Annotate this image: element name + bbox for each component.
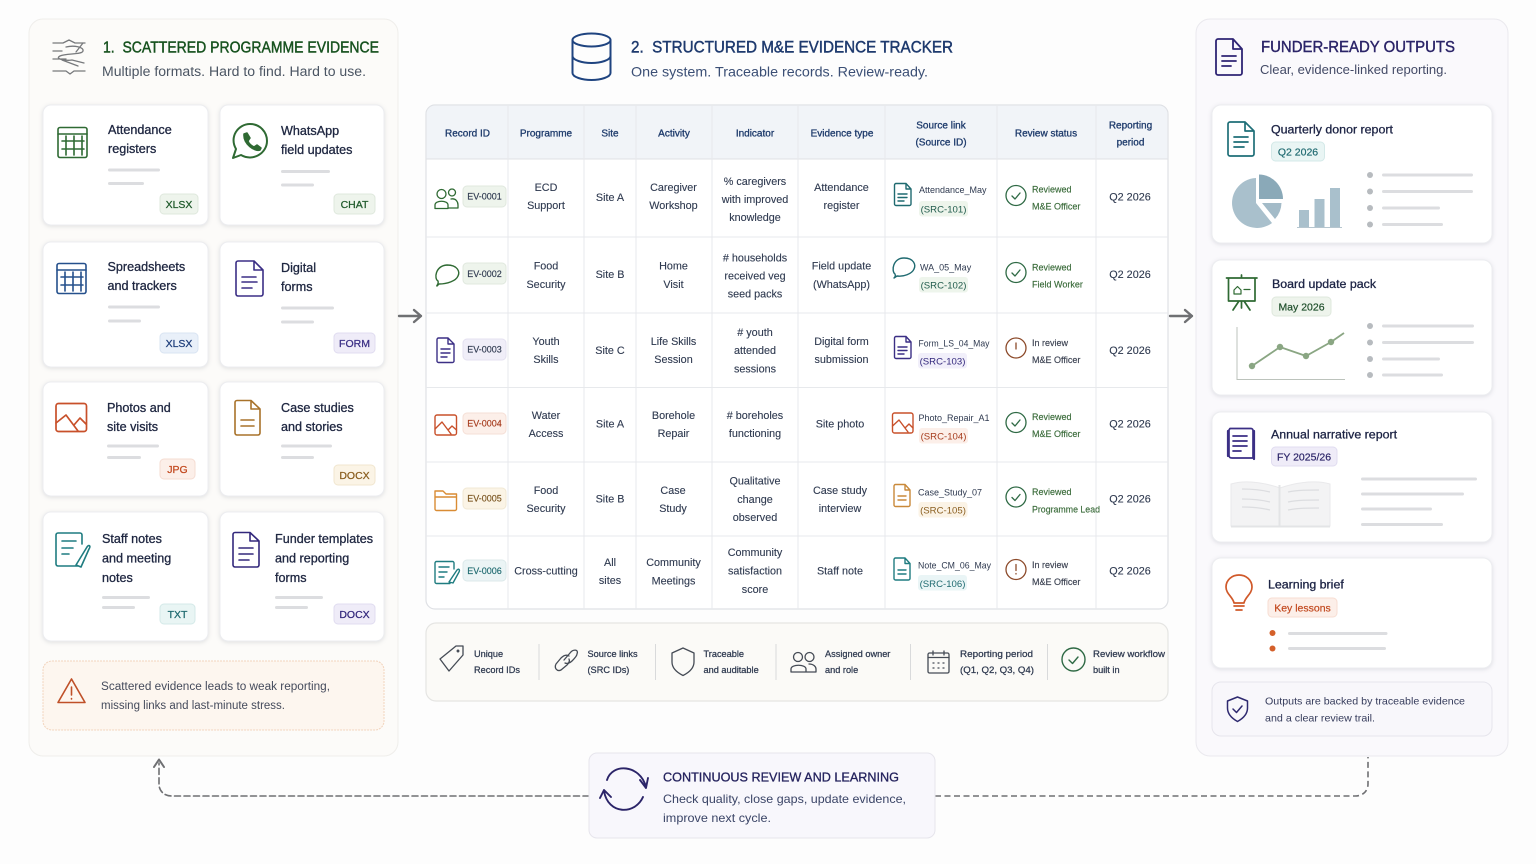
table row: EV-0006 bbox=[435, 547, 1151, 596]
feature: source links: (SRC IDs) bbox=[588, 665, 629, 675]
feature: traceable and auditable: Traceable bbox=[704, 649, 744, 659]
table row: EV-0002: Site B bbox=[596, 269, 624, 281]
source ID pill bbox=[919, 201, 968, 216]
record ID pill: EV-0002 bbox=[467, 269, 502, 279]
callout: traceable evidence note: and a clear review trail. bbox=[1265, 712, 1375, 724]
card: attendance registers bbox=[43, 105, 208, 225]
record ID pill bbox=[463, 560, 506, 581]
tag: XLSX: XLSX bbox=[166, 199, 192, 211]
record ID pill: EV-0005 bbox=[467, 494, 502, 504]
icon: document bbox=[437, 338, 454, 362]
panel background bbox=[1196, 19, 1508, 756]
review status: Programme Lead bbox=[1032, 504, 1100, 514]
tag: CHAT bbox=[334, 194, 375, 214]
card: spreadsheets and trackers bbox=[43, 242, 208, 367]
subheading: One system. Traceable records. Review-ready. bbox=[631, 64, 928, 80]
card: funder templates and reporting forms bbox=[220, 512, 384, 641]
heading: funder-ready outputs: FUNDER-READY OUTPUTS bbox=[1261, 39, 1455, 56]
record ID pill bbox=[463, 413, 506, 434]
tag: JPG bbox=[160, 459, 195, 479]
table row: EV-0003: sessions bbox=[734, 364, 777, 376]
callout: scattered evidence warning bbox=[43, 661, 384, 730]
table row: EV-0004: Site A bbox=[596, 418, 625, 430]
icon: shield check bbox=[1228, 697, 1248, 722]
icon: WhatsApp bbox=[233, 124, 267, 158]
review status: Reviewed bbox=[1032, 487, 1072, 497]
placeholder bullet list bbox=[1367, 323, 1474, 378]
source ID pill bbox=[919, 277, 968, 292]
table row: EV-0006: Note_CM_06_May bbox=[918, 560, 991, 570]
table row: EV-0002: received veg bbox=[724, 270, 786, 282]
icon: teal document bbox=[1228, 122, 1254, 156]
panel: continuous review and learning bbox=[589, 753, 935, 838]
source ID pill bbox=[919, 428, 968, 444]
card: staff notes and meeting notes: notes bbox=[102, 571, 133, 585]
table row: EV-0001: with improved bbox=[721, 194, 788, 206]
source ID pill: (SRC-101) bbox=[921, 204, 966, 216]
source ID pill: (SRC-103) bbox=[920, 356, 965, 368]
heading: tracker title: 2. STRUCTURED M&E EVIDENCE TRACKER bbox=[631, 38, 953, 56]
table row: EV-0005: Site B bbox=[596, 494, 624, 506]
table row: EV-0005: Case bbox=[660, 485, 686, 497]
tag: XLSX bbox=[160, 333, 198, 353]
arrow: evidence to tracker bbox=[399, 310, 421, 322]
icon: amber document bbox=[235, 400, 260, 435]
feature: unique record IDs: Record IDs bbox=[474, 665, 520, 675]
table header row: Review status bbox=[1015, 128, 1077, 140]
panel: continuous review and learning: Check quality, close gaps, update evidence, bbox=[663, 792, 906, 806]
placeholder lines bbox=[1361, 478, 1477, 526]
table row: EV-0005: Food bbox=[534, 485, 558, 497]
icon: calendar bbox=[928, 651, 949, 673]
icon: document bbox=[1216, 39, 1242, 75]
table header row: Programme bbox=[520, 128, 573, 140]
panel background bbox=[29, 19, 398, 756]
callout: scattered evidence warning: Scattered evidence leads to weak reporting, bbox=[101, 681, 330, 693]
tag: FORM bbox=[334, 333, 375, 353]
table row: EV-0001: ECD bbox=[535, 182, 558, 194]
table row: EV-0003: Site C bbox=[595, 345, 625, 357]
table row: EV-0001: Caregiver bbox=[650, 182, 697, 194]
icon: source document bbox=[894, 336, 911, 358]
feature: assigned owner: and role bbox=[825, 665, 858, 675]
card: digital forms: Digital bbox=[281, 261, 316, 275]
icon: warning triangle bbox=[58, 679, 85, 702]
card: WhatsApp field updates: field updates bbox=[281, 143, 352, 157]
tag: TXT bbox=[160, 604, 195, 624]
source ID pill: (SRC-104) bbox=[921, 432, 966, 442]
source ID pill bbox=[918, 575, 967, 590]
table row: EV-0001: Attendance_May bbox=[919, 185, 987, 195]
record ID pill bbox=[463, 263, 506, 284]
record ID pill: EV-0004 bbox=[467, 418, 502, 428]
feature: assigned owner: Assigned owner bbox=[825, 649, 890, 659]
icon: teal note and pen bbox=[56, 533, 90, 567]
table row: EV-0004: Site photo bbox=[816, 418, 864, 430]
feature: traceable and auditable bbox=[672, 648, 759, 676]
table row: EV-0002: # households bbox=[723, 252, 788, 264]
pill: FY 2025/26: FY 2025/26 bbox=[1277, 452, 1331, 464]
tag: XLSX: XLSX bbox=[166, 338, 192, 350]
card: annual narrative report: Annual narrative report bbox=[1271, 428, 1398, 442]
table row: EV-0003: Form_LS_04_May bbox=[918, 338, 990, 348]
icon: shield bbox=[672, 648, 694, 676]
table row: EV-0004: Repair bbox=[658, 428, 690, 440]
table row: EV-0002: Food bbox=[534, 260, 558, 272]
tag: JPG: JPG bbox=[167, 464, 188, 476]
heading: scattered programme evidence: 1. SCATTERED PROGRAMME EVIDENCE bbox=[103, 40, 379, 56]
icon: source chat bubble bbox=[893, 258, 915, 278]
icon: report booklet bbox=[1228, 428, 1254, 459]
table row: EV-0005: Security bbox=[526, 503, 566, 515]
table row: EV-0001: Q2 2026 bbox=[1109, 192, 1151, 204]
table row: EV-0006: Community bbox=[728, 547, 783, 559]
review status: Reviewed bbox=[1032, 184, 1072, 194]
table row: EV-0003: Youth bbox=[532, 336, 560, 348]
review status bbox=[1006, 412, 1080, 439]
table row: EV-0005: observed bbox=[733, 512, 777, 524]
icon: lightbulb bbox=[1226, 575, 1252, 610]
feature: unique record IDs: Unique bbox=[474, 649, 503, 659]
icon: source document bbox=[894, 184, 911, 206]
table row: EV-0002: seed packs bbox=[728, 288, 783, 300]
table row: EV-0004: # boreholes bbox=[727, 410, 784, 422]
table row: EV-0002: Home bbox=[659, 260, 688, 272]
table header row: Reporting bbox=[1109, 120, 1152, 132]
panel: scattered programme evidence bbox=[29, 19, 398, 756]
table row: EV-0003: Skills bbox=[533, 354, 559, 366]
card: case studies and stories: Case studies bbox=[281, 401, 354, 415]
card: funder templates and reporting forms: Funder templates bbox=[275, 532, 373, 546]
table header row: Source link bbox=[916, 120, 967, 132]
table row: EV-0004: Q2 2026 bbox=[1109, 418, 1151, 430]
chart: pie bbox=[1232, 174, 1283, 228]
icon: folder bbox=[435, 491, 456, 510]
review status: M&E Officer bbox=[1032, 577, 1080, 587]
tag: FORM: FORM bbox=[339, 338, 370, 350]
pill: key lessons: Key lessons bbox=[1274, 602, 1331, 614]
table header row: Record ID bbox=[445, 128, 490, 140]
table row: EV-0003: Q2 2026 bbox=[1109, 345, 1151, 357]
feature: reporting period bbox=[928, 649, 1034, 675]
table row: EV-0001: Attendance bbox=[814, 182, 869, 194]
table header row: Indicator bbox=[736, 128, 775, 140]
table row: EV-0003: attended bbox=[734, 345, 776, 357]
card: digital forms bbox=[220, 242, 384, 367]
pill: FY 2025/26 bbox=[1272, 447, 1337, 466]
feature: review workflow bbox=[1062, 648, 1165, 675]
review status bbox=[1006, 560, 1080, 587]
table row: EV-0001: register bbox=[823, 200, 860, 212]
icon: database bbox=[572, 34, 610, 80]
card: staff notes and meeting notes bbox=[43, 512, 208, 641]
source ID pill bbox=[918, 353, 967, 368]
table row: EV-0006: Q2 2026 bbox=[1109, 566, 1151, 578]
card: quarterly donor report bbox=[1212, 105, 1492, 243]
callout: traceable evidence note: Outputs are backed by traceable evidence bbox=[1265, 696, 1465, 708]
subheading: Clear, evidence-linked reporting. bbox=[1260, 63, 1447, 77]
record ID pill: EV-0003 bbox=[467, 344, 502, 354]
callout: scattered evidence warning: missing links and last-minute stress. bbox=[101, 700, 285, 712]
review status: M&E Officer bbox=[1032, 429, 1080, 439]
tag: CHAT: CHAT bbox=[341, 199, 369, 211]
icon: tangled lines bbox=[53, 40, 85, 74]
source ID pill: (SRC-106) bbox=[920, 579, 965, 590]
card: spreadsheets and trackers: and trackers bbox=[108, 279, 177, 293]
table row: EV-0005: interview bbox=[819, 503, 862, 515]
card: funder templates and reporting forms: forms bbox=[275, 571, 306, 585]
icon: blue table bbox=[57, 264, 86, 294]
icon: tag bbox=[440, 646, 463, 671]
card: photos and site visits: Photos and bbox=[107, 401, 171, 415]
icon: indigo document bbox=[233, 532, 259, 567]
card: attendance registers: registers bbox=[108, 142, 156, 156]
table header row: Activity bbox=[658, 128, 690, 140]
pill: key lessons bbox=[1268, 598, 1337, 617]
table row: EV-0003: Digital form bbox=[814, 336, 869, 348]
tag: XLSX bbox=[160, 194, 198, 214]
pill: Q2 2026: Q2 2026 bbox=[1278, 146, 1318, 158]
card: board update pack: Board update pack bbox=[1272, 277, 1377, 291]
icon: note and pen bbox=[435, 562, 459, 584]
icon: people bbox=[791, 652, 816, 672]
table header row: period bbox=[1117, 138, 1144, 148]
placeholder bullets bbox=[1270, 630, 1388, 652]
table row: EV-0003: submission bbox=[814, 354, 869, 366]
card: quarterly donor report: Quarterly donor report bbox=[1271, 122, 1393, 136]
review status: Reviewed bbox=[1032, 262, 1072, 272]
table row: EV-0006: Cross-cutting bbox=[514, 566, 578, 578]
table background bbox=[426, 105, 1168, 609]
card: board update pack bbox=[1212, 260, 1492, 395]
table row: EV-0005: Qualitative bbox=[729, 476, 781, 488]
table row: EV-0003: Life Skills bbox=[651, 336, 697, 348]
table row: EV-0006: score bbox=[742, 584, 768, 596]
icon: check circle bbox=[1062, 648, 1085, 671]
table row: EV-0006: Meetings bbox=[652, 576, 696, 588]
feature: review workflow: Review workflow bbox=[1093, 649, 1165, 659]
panel: feature strip bbox=[426, 623, 1168, 701]
table row: EV-0004: functioning bbox=[729, 428, 781, 440]
table row: EV-0005: change bbox=[737, 494, 773, 506]
review status bbox=[1006, 487, 1100, 514]
feature: reporting period: (Q1, Q2, Q3, Q4) bbox=[960, 665, 1034, 675]
table header row: Evidence type bbox=[811, 128, 874, 140]
callout: traceable evidence note bbox=[1212, 682, 1492, 736]
feature: reporting period: Reporting period bbox=[960, 649, 1033, 659]
table row: EV-0005: Case_Study_07 bbox=[918, 488, 982, 498]
review status: M&E Officer bbox=[1032, 355, 1080, 365]
table row: EV-0005: Q2 2026 bbox=[1109, 494, 1151, 506]
record ID pill: EV-0006 bbox=[467, 566, 502, 576]
review status: Reviewed bbox=[1032, 412, 1072, 422]
subheading: Multiple formats. Hard to find. Hard to use. bbox=[102, 64, 366, 79]
table row: EV-0001: knowledge bbox=[729, 212, 781, 224]
feature: assigned owner bbox=[791, 649, 890, 675]
table row: EV-0006: satisfaction bbox=[728, 566, 782, 578]
table row: EV-0003: Session bbox=[654, 354, 693, 366]
chart: line bbox=[1237, 327, 1345, 380]
card: WhatsApp field updates: WhatsApp bbox=[281, 124, 339, 138]
pill: May 2026: May 2026 bbox=[1278, 302, 1325, 314]
record ID pill bbox=[463, 488, 506, 509]
table header row: (Source ID) bbox=[915, 138, 967, 148]
feature: source links: Source links bbox=[588, 649, 638, 659]
table row: EV-0005: Study bbox=[659, 503, 687, 515]
table row: EV-0002: Q2 2026 bbox=[1109, 269, 1151, 281]
card: annual narrative report bbox=[1212, 412, 1492, 542]
review status bbox=[1006, 184, 1080, 212]
pill: May 2026 bbox=[1272, 297, 1331, 316]
icon: people bbox=[435, 189, 458, 208]
chart: bars bbox=[1297, 188, 1342, 228]
table header row: Site bbox=[601, 128, 619, 140]
tag: DOCX bbox=[334, 604, 375, 624]
table: evidence tracker bbox=[426, 105, 1168, 609]
table header row bbox=[426, 105, 1168, 159]
tag: DOCX bbox=[334, 465, 375, 485]
icon: speech bubble bbox=[436, 265, 459, 286]
card: attendance registers: Attendance bbox=[108, 123, 172, 137]
panel: funder-ready outputs bbox=[1196, 19, 1508, 756]
source ID pill: (SRC-102) bbox=[921, 280, 966, 292]
icon: source photo bbox=[892, 413, 913, 433]
table row: EV-0003: # youth bbox=[737, 327, 773, 339]
card: spreadsheets and trackers: Spreadsheets bbox=[108, 260, 185, 274]
icon: source document bbox=[894, 484, 910, 506]
table row: EV-0006: sites bbox=[599, 575, 622, 587]
arrow: feedback loop to evidence bbox=[154, 760, 589, 796]
review status bbox=[1006, 262, 1083, 290]
table row: EV-0004: Water bbox=[532, 410, 561, 422]
card: staff notes and meeting notes: Staff notes bbox=[102, 532, 162, 546]
icon: cycle arrows bbox=[600, 768, 648, 810]
review status: In review bbox=[1032, 338, 1069, 348]
source ID pill: (SRC-105) bbox=[920, 506, 966, 516]
table row: EV-0004: Access bbox=[529, 428, 564, 440]
record ID pill bbox=[463, 339, 506, 360]
review status: M&E Officer bbox=[1032, 202, 1080, 212]
table row: EV-0001: Site A bbox=[596, 192, 625, 204]
table row: EV-0004: Photo_Repair_A1 bbox=[918, 413, 990, 423]
record ID pill bbox=[463, 186, 506, 207]
table row: EV-0006: Staff note bbox=[817, 566, 863, 578]
table row: EV-0004 bbox=[435, 410, 1151, 444]
table row: EV-0002: Field update bbox=[812, 260, 871, 272]
placeholder bullet list bbox=[1367, 172, 1473, 228]
table row: EV-0002: (WhatsApp) bbox=[813, 279, 870, 291]
table row: EV-0006: All bbox=[604, 557, 616, 569]
card: case studies and stories bbox=[220, 382, 384, 496]
card: case studies and stories: and stories bbox=[281, 420, 343, 434]
card: learning brief bbox=[1212, 558, 1492, 668]
review status: In review bbox=[1032, 560, 1069, 570]
table row: EV-0003 bbox=[437, 327, 1151, 376]
card: funder templates and reporting forms: and reporting bbox=[275, 552, 349, 566]
tag: TXT: TXT bbox=[168, 609, 188, 621]
tag: DOCX: DOCX bbox=[339, 470, 370, 482]
card: photos and site visits: site visits bbox=[107, 420, 158, 434]
table row: EV-0002: Visit bbox=[663, 279, 684, 291]
card: photos and site visits bbox=[43, 382, 208, 496]
card: WhatsApp field updates bbox=[220, 105, 384, 225]
panel: continuous review and learning: improve next cycle. bbox=[663, 811, 771, 825]
icon: source document bbox=[894, 558, 910, 580]
icon: orange photo bbox=[56, 404, 86, 432]
icon: photo bbox=[435, 415, 456, 435]
tag: DOCX: DOCX bbox=[339, 609, 370, 621]
table row: EV-0001 bbox=[435, 176, 1151, 224]
feature: source links bbox=[555, 649, 638, 675]
feature: review workflow: built in bbox=[1093, 665, 1120, 675]
table row: EV-0004: Borehole bbox=[652, 410, 695, 422]
card: learning brief: Learning brief bbox=[1268, 578, 1344, 592]
source ID pill bbox=[918, 502, 968, 518]
icon: chain link bbox=[555, 650, 577, 671]
icon: purple document bbox=[236, 261, 263, 296]
card: digital forms: forms bbox=[281, 280, 312, 294]
table row: EV-0006: Community bbox=[646, 557, 701, 569]
arrow: tracker to outputs bbox=[1170, 310, 1192, 322]
table row: EV-0002: Security bbox=[526, 279, 566, 291]
table row: EV-0005: Case study bbox=[813, 485, 868, 497]
table row: EV-0002: WA_05_May bbox=[920, 262, 972, 272]
arrow: outputs feedback line bbox=[935, 757, 1368, 796]
record ID pill: EV-0001 bbox=[467, 192, 502, 202]
table row: EV-0001: % caregivers bbox=[724, 176, 787, 188]
card: staff notes and meeting notes: and meeting bbox=[102, 552, 171, 566]
icon: green table bbox=[58, 128, 87, 158]
pill: Q2 2026 bbox=[1272, 142, 1324, 161]
panel: continuous review and learning: CONTINUOUS REVIEW AND LEARNING bbox=[663, 770, 899, 784]
heading block: structured tracker bbox=[572, 34, 953, 80]
table row: EV-0001: Workshop bbox=[649, 200, 698, 212]
table row: EV-0001: Support bbox=[527, 200, 565, 212]
review status: Field Worker bbox=[1032, 280, 1083, 290]
table row: EV-0002 bbox=[436, 252, 1151, 300]
feature: traceable and auditable: and auditable bbox=[704, 665, 759, 675]
feature: unique record IDs bbox=[440, 646, 520, 675]
table row: EV-0005 bbox=[435, 476, 1151, 524]
icon: presentation board bbox=[1226, 275, 1257, 310]
illustration: open book bbox=[1231, 482, 1330, 528]
review status bbox=[1006, 338, 1080, 365]
